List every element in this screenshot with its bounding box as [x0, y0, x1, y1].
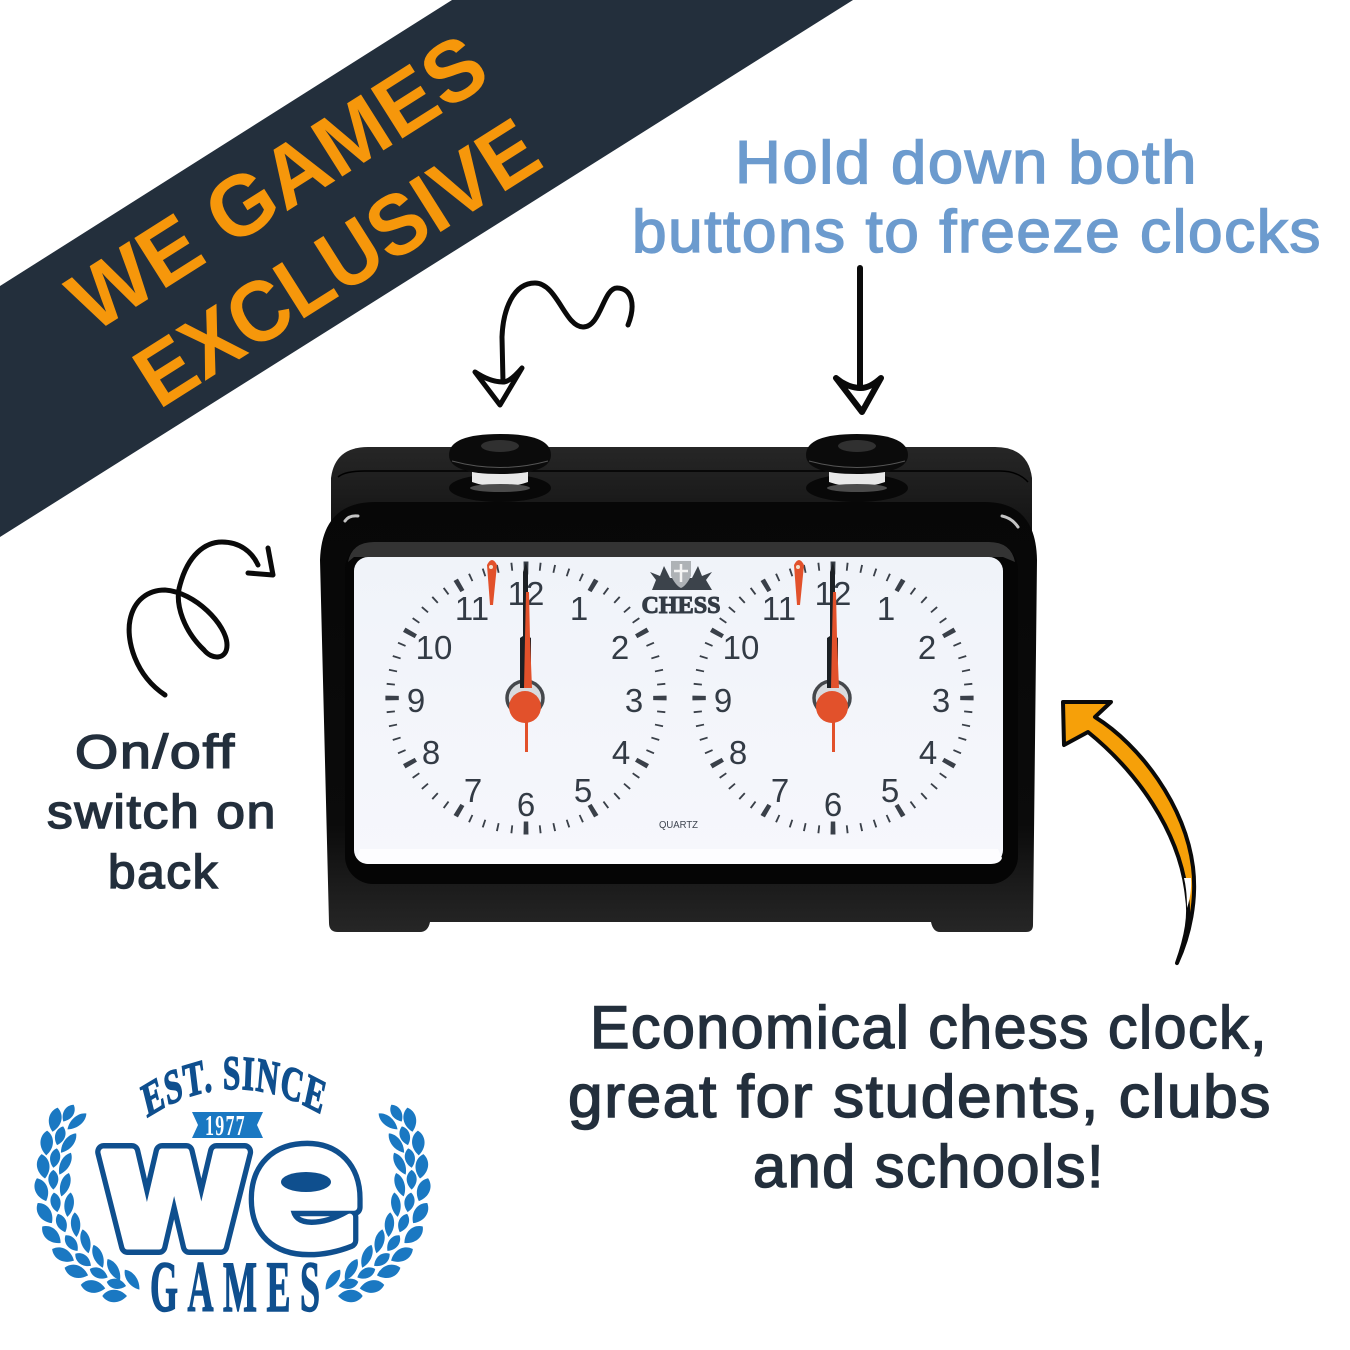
banner: WE Games Exclusive — [0, 0, 853, 537]
heading: freeze clocks instruction: buttons to freeze clocks — [632, 198, 1322, 265]
clock front housing — [320, 502, 1037, 932]
right dial — [697, 560, 969, 830]
left laurel — [31, 1102, 143, 1302]
year ribbon: 1977 — [205, 1111, 246, 1142]
logo: WE Games — [34, 1056, 431, 1327]
icon: straight arrow to right button — [836, 268, 881, 412]
chess emblem: CHESS — [642, 593, 720, 619]
heading: freeze clocks instruction — [632, 129, 1322, 265]
icon: squiggle arrow to left button — [475, 283, 632, 405]
left dial — [390, 560, 662, 830]
text: economical chess clock note: great for students, clubs — [568, 1063, 1272, 1130]
clock bezel — [345, 542, 1018, 884]
text: on/off switch note: On/off — [75, 725, 236, 778]
est. since arc: EST. SINCE — [139, 1056, 326, 1118]
chess emblem — [642, 561, 720, 619]
text: on/off switch note: back — [108, 845, 219, 898]
banner text line 2: EXCLUSIVE — [118, 100, 556, 426]
chess clock — [320, 434, 1037, 932]
text: on/off switch note — [47, 725, 277, 898]
right laurel — [322, 1102, 434, 1302]
text: on/off switch note: switch on — [47, 785, 277, 838]
games wordmark: GAMES — [150, 1248, 329, 1327]
we wordmark: we — [98, 1086, 362, 1287]
we wordmark: we — [98, 1086, 362, 1287]
banner text line 1: WE GAMES — [52, 16, 504, 350]
right button — [806, 434, 908, 502]
year ribbon — [192, 1111, 263, 1142]
white tail of orange arrow — [1184, 878, 1191, 908]
icon: orange curved arrow — [1063, 702, 1194, 963]
banner ribbon — [0, 0, 853, 537]
clock rear housing — [331, 447, 1032, 560]
heading: freeze clocks instruction: Hold down both — [735, 129, 1198, 196]
left button — [449, 434, 551, 502]
quartz label: QUARTZ — [659, 820, 698, 831]
clock face — [354, 557, 1003, 864]
text: economical chess clock note — [568, 994, 1272, 1200]
text: economical chess clock note: Economical chess clock, — [590, 994, 1268, 1061]
text: economical chess clock note: and schools! — [753, 1133, 1105, 1200]
clock highlights — [345, 516, 1018, 527]
icon: spiral arrow to on/off switch — [129, 542, 273, 695]
